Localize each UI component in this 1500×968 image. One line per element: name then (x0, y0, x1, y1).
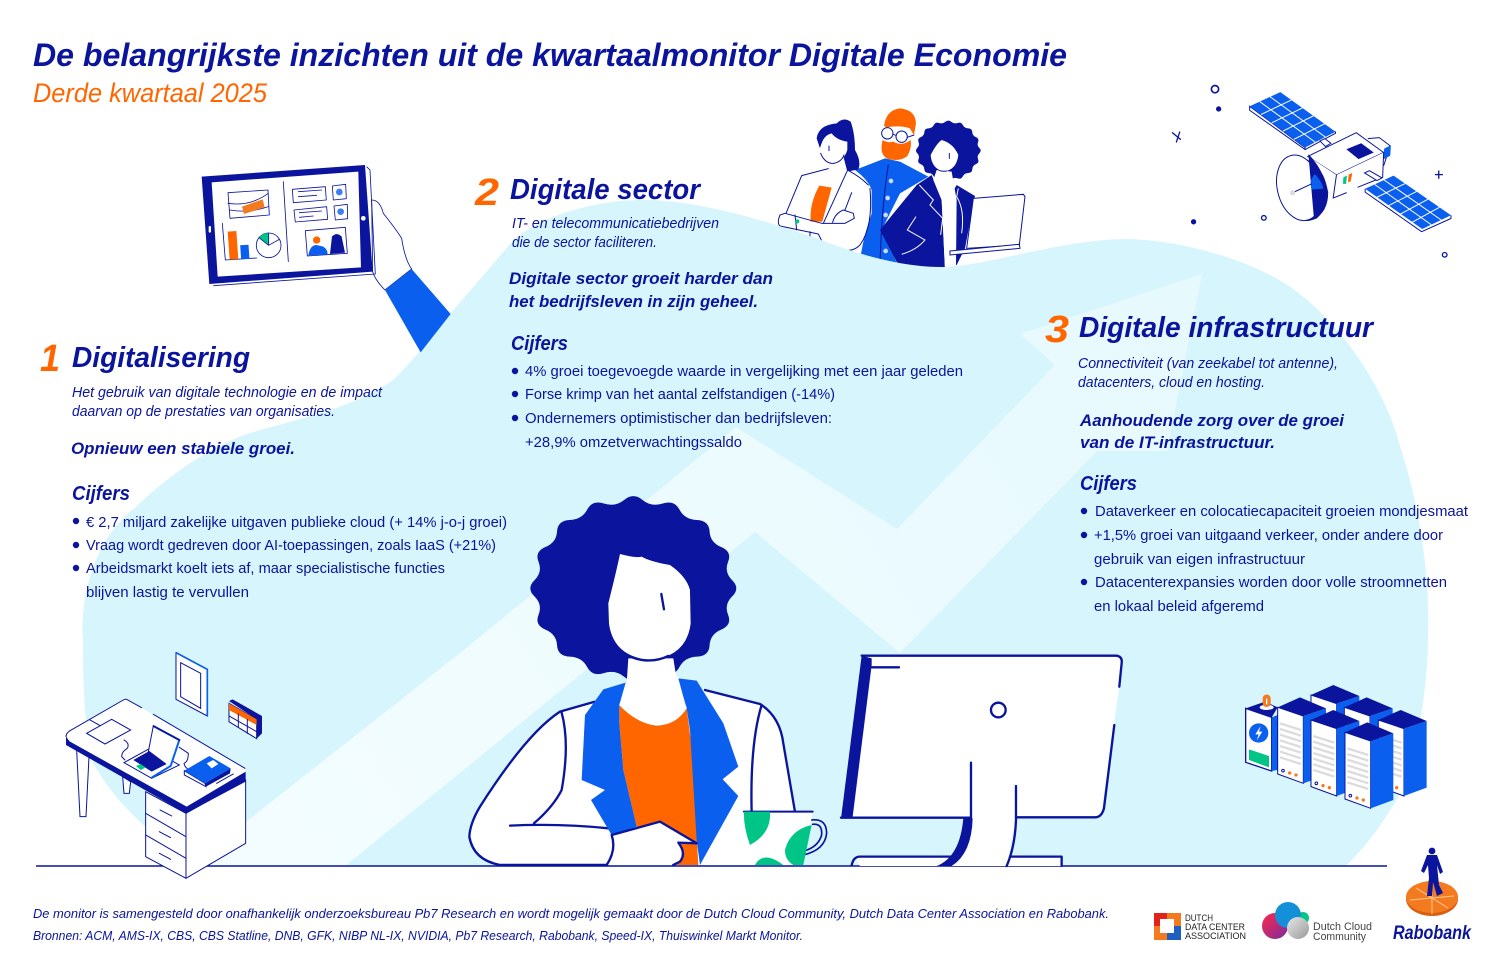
satellite body (1308, 133, 1384, 198)
illustration: desk with laptop (66, 653, 262, 878)
person: woman with curly hair and laptop (880, 121, 1025, 270)
cijfers list: Dataverkeer en colocatiecapaciteit groeien mondjesmaat (1095, 504, 1468, 520)
person: woman with arms crossed (778, 120, 872, 253)
illustration: satellite (1172, 86, 1451, 257)
description: Connectiviteit (van zeekabel tot antenne), (1078, 356, 1338, 372)
footer note (33, 906, 1109, 943)
heading: Digitale sector (510, 174, 702, 206)
cijfers list: 4% groei toegevoegde waarde in vergelijking met een jaar geleden (525, 364, 963, 380)
desk legs (77, 750, 131, 817)
cijfers list (1081, 504, 1468, 615)
illustration: three colleagues (778, 108, 1025, 270)
illustration: woman at desk (469, 496, 827, 865)
description (512, 216, 719, 251)
key message: van de IT-infrastructuur. (1080, 433, 1275, 452)
key message: Digitale sector groeit harder dan (509, 269, 773, 288)
description: IT- en telecommunicatiebedrijven (512, 216, 719, 232)
baseline (36, 865, 1387, 867)
solar panel top (1250, 92, 1335, 150)
battery unit (1246, 695, 1278, 771)
description (72, 385, 383, 420)
cijfers list (73, 515, 507, 601)
key message: Aanhoudende zorg over de groei (1079, 411, 1345, 430)
cijfers list: Ondernemers optimistischer dan bedrijfsleven: (525, 411, 832, 427)
illustration: monitor (841, 656, 1123, 866)
description (1078, 356, 1338, 391)
cijfers list: Arbeidsmarkt koelt iets af, maar specialistische functies (86, 561, 445, 577)
cijfers list: +28,9% omzetverwachtingssaldo (525, 435, 742, 451)
solar panel bottom (1365, 176, 1451, 232)
description: datacenters, cloud en hosting. (1078, 375, 1265, 391)
cijfers list: en lokaal beleid afgeremd (1094, 599, 1264, 615)
description: daarvan op de prestaties van organisaties. (72, 404, 335, 420)
subtitle: Derde kwartaal 2025 (33, 78, 268, 108)
face (608, 554, 691, 660)
section 3: Digitale infrastructuur (1045, 309, 1468, 615)
logo: Dutch Data Center Association: DATA CENTER (1185, 922, 1245, 933)
cijfers list: Datacenterexpansies worden door volle stroomnetten (1095, 575, 1447, 591)
cijfers list: gebruik van eigen infrastructuur (1094, 552, 1305, 568)
monitor stand (852, 763, 1062, 866)
hair (530, 496, 736, 681)
footer note: Bronnen: ACM, AMS-IX, CBS, CBS Statline, DNB, GFK, NIBP NL-IX, NVIDIA, Pb7 Research, Rabobank, Speed-IX, Thuiswinkel Markt Monitor. (33, 928, 803, 943)
cijfers list: blijven lastig te vervullen (86, 585, 249, 601)
laptop (124, 726, 179, 778)
logo: Rabobank: Rabobank (1393, 923, 1472, 944)
logo: Rabobank (1393, 848, 1472, 944)
logo: Dutch Cloud Community (1262, 902, 1372, 943)
cijfers list: Forse krimp van het aantal zelfstandigen (-14%) (525, 387, 835, 403)
heading: Digitale infrastructuur (1079, 312, 1375, 344)
key message: Opnieuw een stabiele groei. (71, 439, 295, 458)
section 1: Digitalisering (40, 338, 507, 601)
key message: het bedrijfsleven in zijn geheel. (509, 292, 758, 311)
number 3: 3 (1045, 309, 1069, 351)
logo: Dutch Data Center Association (1154, 913, 1246, 942)
wall frame (176, 653, 207, 716)
cijfers list: Vraag wordt gedreven door AI-toepassingen, zoals IaaS (+21%) (86, 538, 496, 554)
footer note: De monitor is samengesteld door onafhankelijk onderzoeksbureau Pb7 Research en wordt mogelijk gemaakt door de Dutch Cloud Community, Dutch Data Center Association en Rabobank. (33, 906, 1109, 921)
logo: Dutch Data Center Association: DUTCH (1185, 913, 1213, 924)
key message (509, 269, 773, 311)
wall calendar (229, 699, 262, 739)
cijfers heading: Cijfers (511, 333, 568, 355)
description: Het gebruik van digitale technologie en de impact (72, 385, 383, 401)
illustration: server racks (1246, 685, 1427, 808)
background blob (83, 200, 1428, 866)
cijfers heading: Cijfers (1080, 473, 1137, 495)
desk pedestal (146, 780, 246, 878)
logo: Dutch Cloud Community: Community (1313, 931, 1366, 943)
cijfers list: +1,5% groei van uitgaand verkeer, onder andere door (1094, 528, 1443, 544)
coffee mug (744, 812, 827, 865)
book (184, 756, 231, 787)
key message (1079, 411, 1345, 452)
growth arrow (190, 274, 1202, 866)
title: De belangrijkste inzichten uit de kwartaalmonitor Digitale Economie (33, 37, 1067, 73)
number 1: 1 (40, 338, 60, 380)
cijfers heading: Cijfers (72, 483, 130, 505)
number 2: 2 (474, 172, 499, 214)
decorative dots and crosses (1172, 86, 1447, 257)
body and jacket (469, 658, 797, 865)
heading: Digitalisering (72, 342, 250, 374)
cijfers list: € 2,7 miljard zakelijke uitgaven publieke cloud (+ 14% j-o-j groei) (86, 515, 507, 531)
satellite dish (1270, 150, 1328, 225)
logo: Dutch Cloud Community: Dutch Cloud (1313, 921, 1372, 933)
desk top (66, 699, 246, 813)
section 2: Digitale sector (474, 172, 963, 451)
logo: Dutch Data Center Association: ASSOCIATION (1185, 931, 1246, 942)
person: man with red beard (855, 108, 928, 270)
description: die de sector faciliteren. (512, 235, 657, 251)
illustration: tablet in hand (202, 165, 451, 352)
cijfers list (512, 364, 963, 451)
